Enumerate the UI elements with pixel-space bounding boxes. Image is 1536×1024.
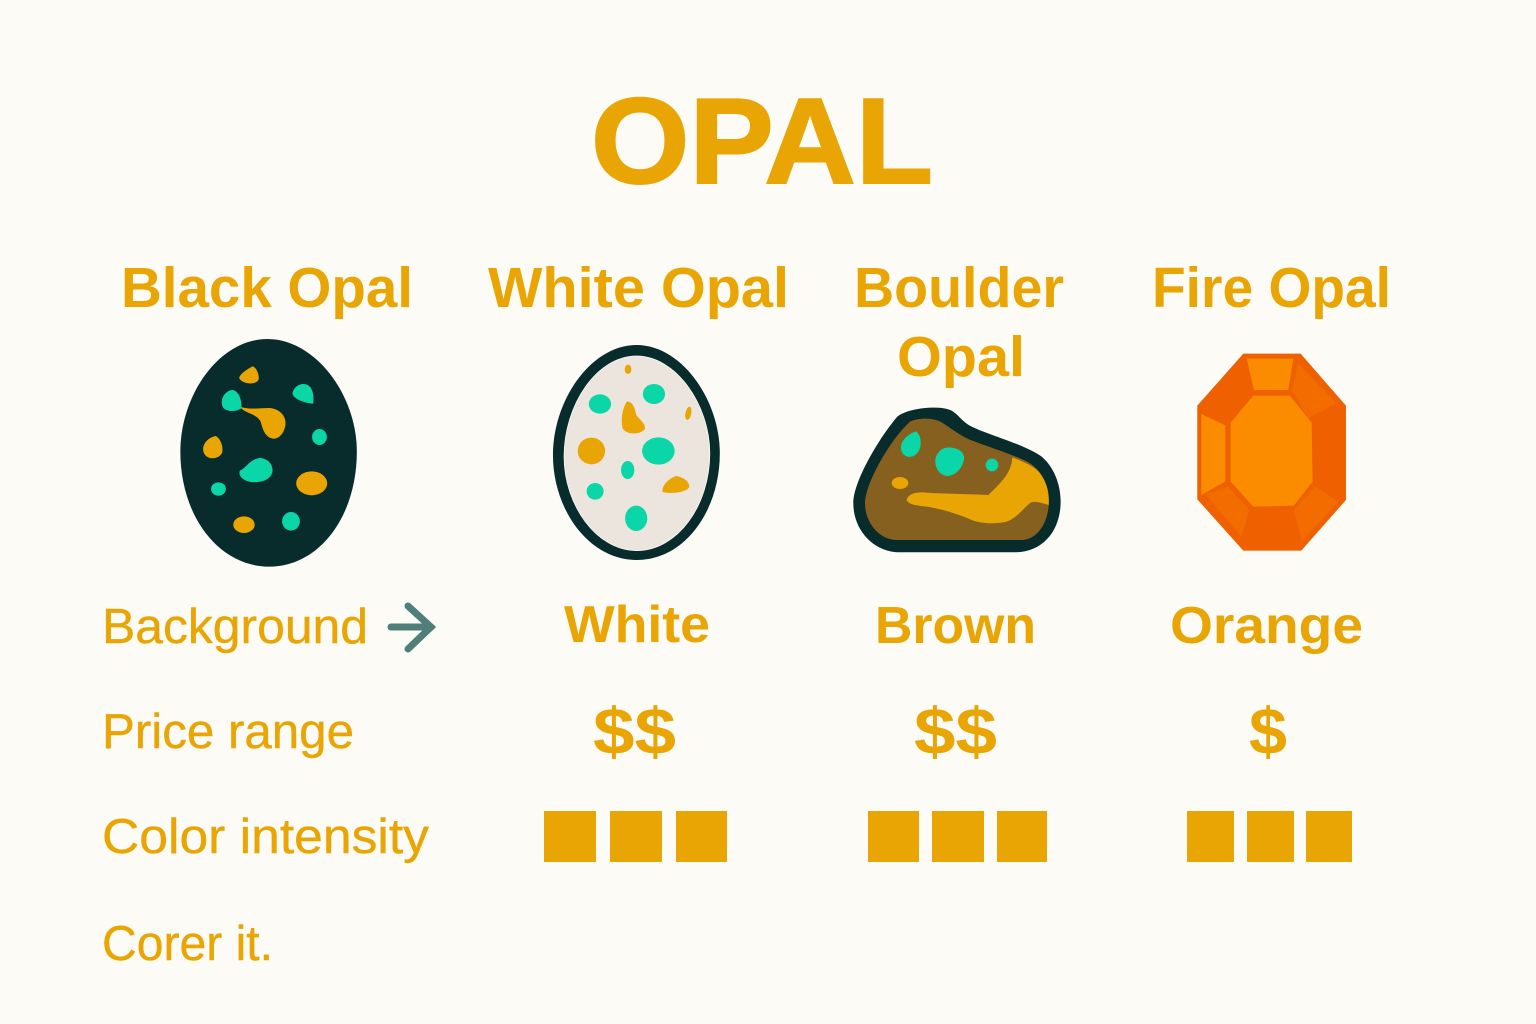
heading: Boulder Opal [854,256,1064,389]
heading: Black Opal: Black Opal [121,256,413,320]
icon: arrow [391,606,431,649]
value: White: White [564,596,710,654]
title: OPAL [591,73,933,209]
icon: black opal gem [180,339,357,567]
price: Boulder Opal: $$ [914,694,997,768]
row label: Price range: Price range [102,705,354,759]
row label: Background: Background [102,600,368,654]
price: Fire Opal: $ [1249,694,1287,768]
heading: Boulder Opal: Boulder [854,256,1064,320]
row label: Corer it.: Corer it. [102,917,273,971]
icon: boulder opal gem [853,408,1061,552]
heading: Boulder Opal: Opal [897,325,1025,389]
intensity squares: Fire Opal [1187,811,1352,862]
price: White Opal: $$ [593,694,676,768]
icon: white opal gem [553,345,720,560]
heading: White Opal: White Opal [488,256,789,320]
intensity squares: Boulder Opal [868,811,1047,862]
heading: Fire Opal: Fire Opal [1152,256,1391,320]
value: Brown: Brown [875,597,1036,655]
value: Orange: Orange [1170,597,1363,655]
intensity squares: White Opal [544,811,727,862]
icon: fire opal gem [1197,354,1346,551]
row label: Color intensity: Color intensity [102,810,430,864]
